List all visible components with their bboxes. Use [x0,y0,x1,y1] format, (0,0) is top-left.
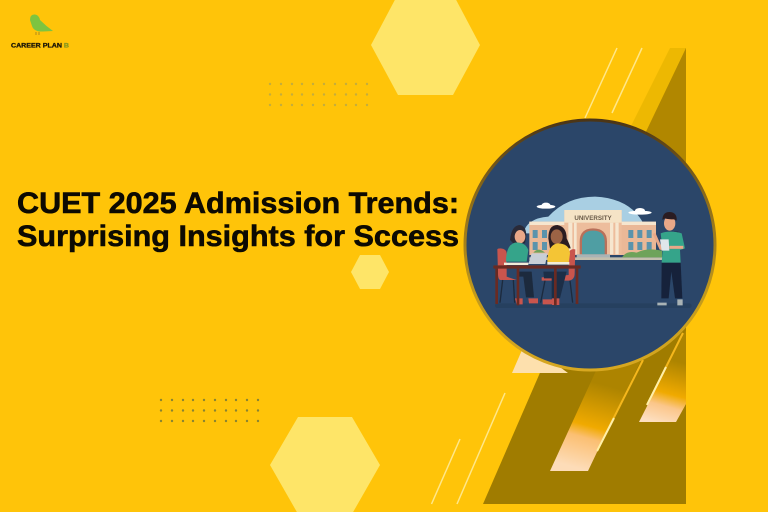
logo text: CAREER PLAN B [11,42,70,49]
student right [543,225,571,305]
decorative angled shapes [432,48,686,504]
circle [465,120,715,370]
icon: green bird [30,14,53,35]
standing student [654,212,685,305]
books [504,262,569,265]
hexagon: small centre [351,255,389,289]
laptop [528,253,547,264]
university building [529,210,663,260]
table group: two students [493,225,581,305]
university sign: UNIVERSITY [574,215,612,222]
ground shadow [495,303,692,308]
logo [11,14,70,49]
table [493,265,581,305]
title line 2: Surprising Insights for Sccess [17,220,459,253]
chair left [497,248,517,303]
circle illustration panel [465,120,715,370]
hexagon: top [371,0,480,95]
title line 1: CUET 2025 Admission Trends: [17,187,459,220]
campus dome and clouds [523,197,652,233]
title [17,187,459,253]
dot grid: top [269,83,368,106]
student left [506,225,538,304]
chair right [541,249,575,303]
hexagon: bottom [270,417,380,512]
illustration [493,197,692,308]
dot grid: bottom [160,399,259,422]
